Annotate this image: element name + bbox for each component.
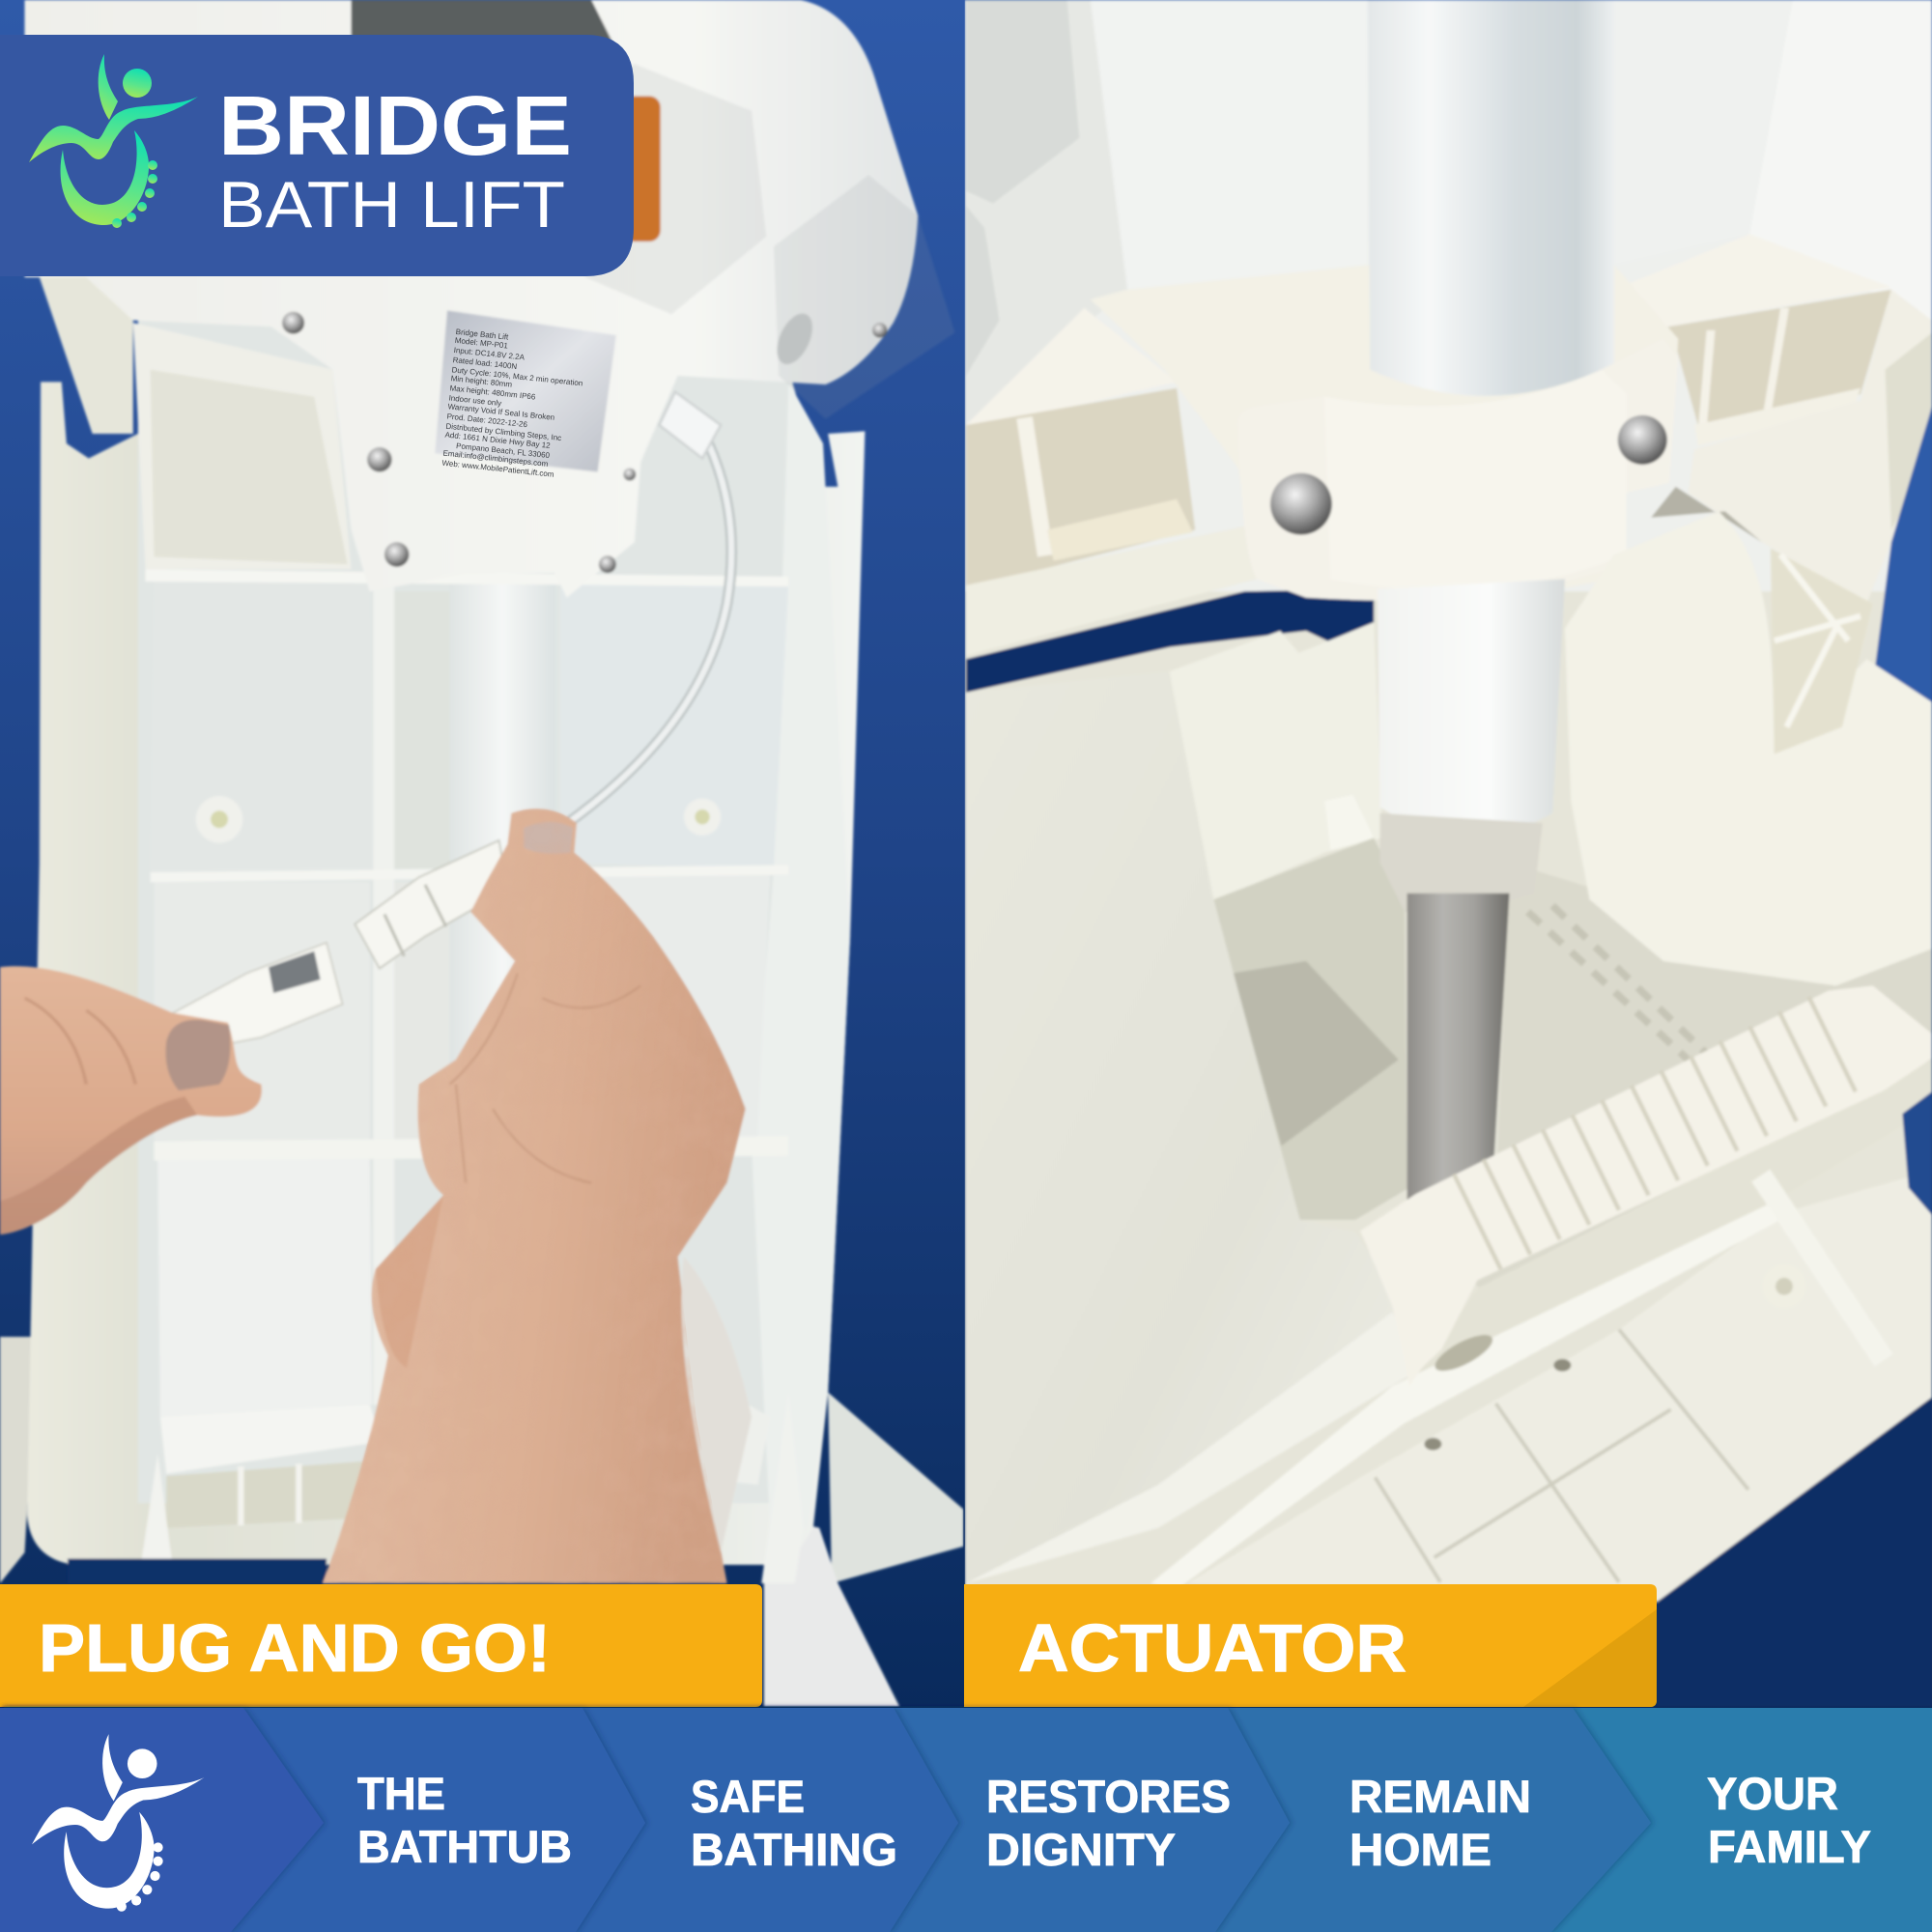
caption: plug and go: PLUG AND GO!: [39, 1610, 551, 1686]
label: safe bathing: BATHING: [691, 1824, 897, 1875]
label: your family: YOUR: [1707, 1768, 1838, 1819]
label: the bathtub: THE: [357, 1768, 445, 1819]
spec label text: Add: 1661 N Dixie Hwy Bay 12: [444, 431, 552, 450]
spec label text: Distributed by Climbing Steps, Inc: [445, 422, 562, 442]
label: the bathtub: BATHTUB: [357, 1821, 572, 1872]
label: safe bathing: SAFE: [691, 1771, 805, 1822]
spec label text: Bridge Bath Lift: [455, 327, 510, 342]
caption: actuator: [964, 1584, 1657, 1707]
spec label text: Pompano Beach, FL 33060: [456, 441, 551, 460]
spec label text: [441, 327, 587, 481]
label: restores dignity: [986, 1771, 1231, 1875]
spec label text: Email:info@climbingsteps.com: [442, 449, 549, 469]
label: your family: FAMILY: [1708, 1821, 1871, 1872]
label: remain home: [1350, 1771, 1531, 1875]
spec label text: Prod. Date: 2022-12-26: [446, 412, 528, 429]
spec label text: Duty Cycle: 10%, Max 2 min operation: [451, 365, 583, 387]
photo: actuator: [965, 0, 1932, 1707]
label: remain home: REMAIN: [1350, 1771, 1531, 1822]
label: restores dignity: DIGNITY: [986, 1824, 1176, 1875]
bottom chevron band: [0, 1708, 1932, 1932]
heading: BATH LIFT: BATH LIFT: [218, 168, 565, 242]
icon: green logo: [29, 54, 198, 228]
spec label text: Indoor use only: [448, 393, 502, 408]
label: your family: [1707, 1768, 1871, 1872]
spec label text: Warranty Void If Seal Is Broken: [447, 402, 555, 422]
photo: plug and go: [0, 0, 963, 1707]
spec label text: Web: www.MobilePatientLift.com: [441, 459, 554, 479]
label: the bathtub: [357, 1768, 572, 1872]
spec label text: Rated load: 1400N: [452, 355, 518, 371]
heading: BRIDGE: BRIDGE: [218, 79, 572, 173]
spec label text: Max height: 480mm IP66: [449, 384, 536, 402]
label: safe bathing: [691, 1771, 897, 1875]
caption: plug and go: [0, 1584, 762, 1707]
icon: white logo: [32, 1734, 205, 1912]
spec label text: Model: MP-P01: [454, 336, 509, 351]
caption: actuator: ACTUATOR: [1018, 1610, 1406, 1686]
label: restores dignity: RESTORES: [986, 1771, 1231, 1822]
label: remain home: HOME: [1350, 1824, 1492, 1875]
spec label text: Input: DC14.8V 2.2A: [453, 346, 526, 362]
logo banner: [0, 35, 634, 276]
spec label text: Min height: 80mm: [450, 374, 513, 389]
